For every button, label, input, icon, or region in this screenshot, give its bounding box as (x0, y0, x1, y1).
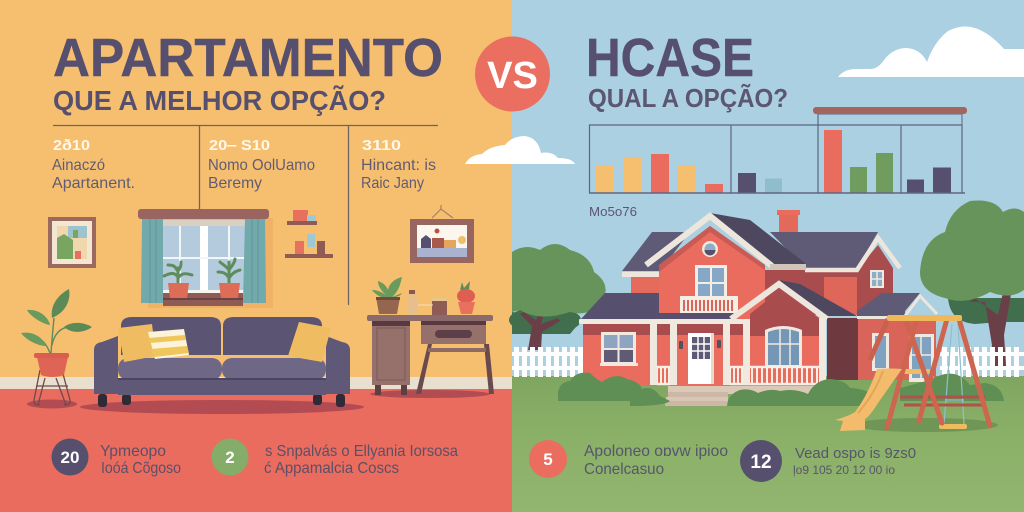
swing and slide playset (835, 315, 998, 432)
stat column 3: Raic Jany (361, 175, 424, 192)
house (558, 210, 1004, 406)
chart caption: Mo5o76 (589, 204, 637, 219)
stat column 3: Hincant: is (361, 157, 436, 174)
desk pot with plant (457, 281, 475, 314)
stat text 2: s Snpalvás o Ellyania Iorsosa (265, 443, 458, 460)
swing ropes (944, 324, 964, 424)
right side windows (872, 333, 934, 382)
stat badge 2 (212, 438, 248, 476)
round window (702, 241, 718, 257)
sill plant right (218, 259, 240, 298)
stat column 1: Ainaczó (52, 157, 105, 174)
main gable trim (646, 216, 772, 266)
fence left (512, 347, 583, 377)
desk (367, 277, 494, 398)
right upper wall (765, 270, 893, 315)
stat column 1: Apartanent. (52, 175, 135, 192)
curtain rod (138, 209, 269, 219)
fence right (940, 347, 1024, 377)
upper window (695, 265, 727, 297)
side roof (857, 293, 920, 316)
stat badge 12 (740, 440, 782, 482)
right lower wall (827, 318, 859, 380)
tree left (509, 244, 606, 350)
panel: apartment side (0, 0, 512, 512)
window with curtains (138, 209, 273, 308)
stat badge 2: 2 (225, 448, 235, 467)
top beam (887, 315, 962, 321)
stat column 3: 3110 (362, 137, 401, 154)
chimney (777, 210, 800, 243)
right gable trim (805, 238, 900, 270)
house subtitle: QUAL A OPÇÃO? (588, 83, 788, 113)
stat column 1 (52, 137, 135, 192)
desk plant (372, 277, 402, 314)
panel: house side (465, 0, 1024, 512)
stat text 20: Ypmeopo (100, 443, 166, 460)
left window (600, 332, 638, 366)
stat badge 12: 12 (750, 452, 772, 473)
wall shelves (285, 210, 333, 258)
porch railings (657, 367, 826, 384)
cloud large (838, 27, 1024, 77)
main right roof (770, 232, 878, 268)
front gable roof (779, 280, 857, 316)
swing seat (939, 424, 967, 429)
stat badge 5 (529, 440, 567, 478)
stat text 2: ć Appamalcia Coscs (264, 460, 399, 477)
front door (688, 333, 714, 384)
front gable trim (731, 284, 827, 319)
house title: HCASE (586, 28, 754, 88)
stat column 2 (208, 137, 315, 192)
stat text 5: Conelcasuo (584, 461, 664, 478)
balcony railing (680, 296, 738, 313)
stat badge 20: 20 (61, 448, 79, 467)
bushes right (727, 379, 868, 406)
main gable wall (659, 226, 765, 320)
stat text 5 (584, 443, 728, 478)
cushion left (118, 324, 156, 362)
bushes behind swing (900, 374, 1004, 401)
stat badge 20 (52, 438, 88, 476)
tree right (920, 200, 1024, 366)
stat text 5: Apoloneo oɒvw ipioo (584, 443, 728, 460)
cushion right (288, 322, 331, 362)
bar chart (589, 107, 967, 193)
cloud small (465, 136, 575, 164)
stat text 12: ļo9 105 20 12 00 io (793, 463, 895, 477)
back left roof (622, 232, 690, 271)
apartment stat dividers (53, 125, 438, 305)
stat column 2: Beremy (208, 175, 262, 192)
bottle (407, 290, 417, 315)
main dark roof (710, 213, 805, 268)
floor plant on stand (21, 289, 92, 408)
cup and box (418, 298, 447, 315)
front steps (665, 386, 818, 406)
VS badge: VS (487, 55, 538, 97)
stat column 2: 20‒ S10 (209, 137, 270, 154)
wall picture left (48, 217, 96, 268)
cushion striped (148, 329, 189, 359)
arched window (765, 326, 802, 367)
stat badge 5: 5 (543, 450, 553, 469)
slide (835, 368, 902, 431)
stat text 20: Ioóá Cõgoso (101, 460, 181, 477)
stat text 12: Vead ospo is 9zs0 (795, 445, 916, 462)
porch columns (650, 318, 826, 386)
sill plant left (164, 262, 192, 298)
front wall (583, 324, 753, 386)
stat text 20 (100, 443, 181, 477)
wall picture right (410, 205, 474, 263)
stat column 2: Nomo OolUamo (208, 157, 315, 174)
apartment subtitle: QUE A MELHOR OPÇÃO? (53, 85, 386, 116)
porch lamps (679, 340, 721, 349)
stat text 2 (264, 443, 458, 477)
porch roof (581, 293, 735, 319)
bushes left (558, 373, 670, 406)
sofa (80, 317, 364, 414)
apartment title: APARTAMENTO (53, 28, 443, 88)
curtains (141, 219, 163, 303)
front gable wall (750, 290, 819, 385)
VS badge (475, 36, 550, 112)
stat text 12 (793, 445, 916, 477)
stat column 3 (361, 137, 436, 192)
stat column 1: 2ð10 (53, 137, 90, 154)
